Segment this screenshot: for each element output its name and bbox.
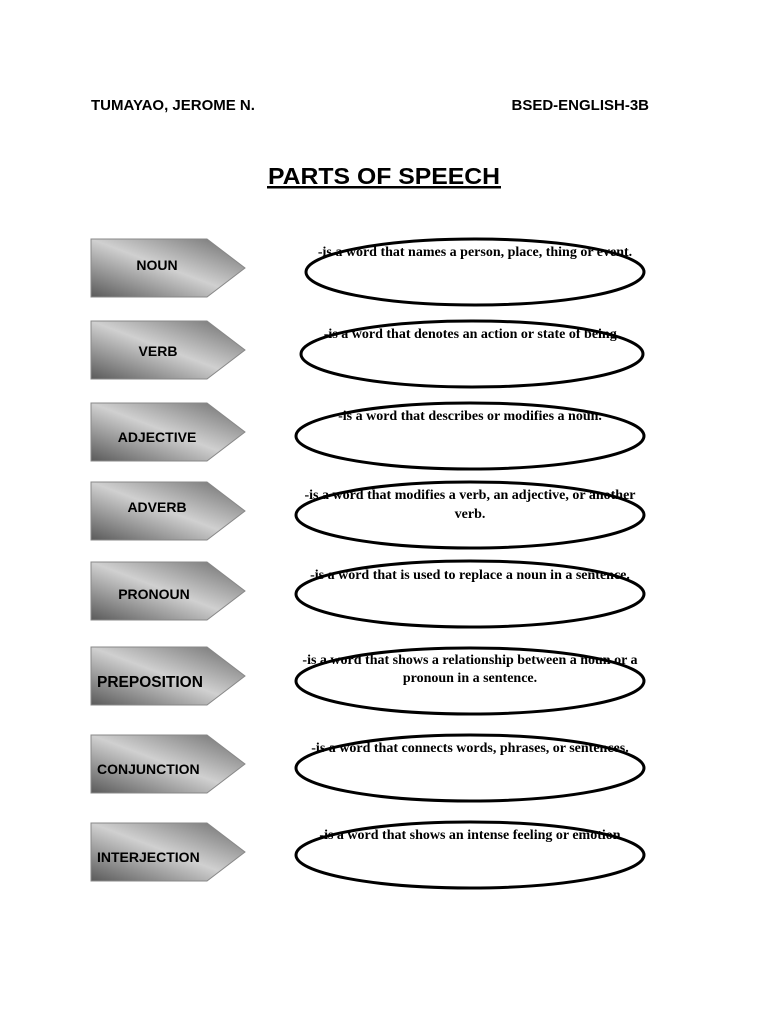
row: conjunction: [91, 735, 644, 801]
title: PARTS OF SPEECH: [268, 163, 500, 189]
row: pronoun: [91, 561, 644, 627]
row: pronoun: -is a word that is used to replace a noun in a sentence.: [310, 568, 630, 583]
row: preposition: pronoun in a sentence.: [403, 671, 537, 686]
row: adjective: -is a word that describes or modifies a noun.: [338, 409, 602, 424]
row: verb: [91, 321, 643, 387]
row: preposition: PREPOSITION: [97, 674, 203, 691]
row: adverb: [91, 482, 644, 548]
row: adverb: ADVERB: [127, 499, 187, 515]
header: course: BSED-ENGLISH-3B: [511, 97, 649, 114]
row: verb: VERB: [139, 343, 177, 359]
row: interjection: INTERJECTION: [97, 849, 200, 865]
row: interjection: -is a word that shows an intense feeling or emotion: [319, 828, 621, 843]
row: conjunction: -is a word that connects words, phrases, or sentences.: [311, 741, 629, 756]
row: preposition: -is a word that shows a relationship between a noun or a: [302, 653, 638, 668]
row: adjective: ADJECTIVE: [118, 429, 196, 445]
row: noun: [91, 239, 644, 305]
row: noun: NOUN: [136, 257, 178, 273]
row: conjunction: CONJUNCTION: [97, 761, 200, 777]
header: name: TUMAYAO, JEROME N.: [91, 97, 255, 114]
row: adverb: -is a word that modifies a verb, an adjective, or another: [304, 488, 636, 503]
row: preposition: [91, 647, 644, 714]
row: noun: -is a word that names a person, place, thing or event.: [318, 245, 632, 260]
row: adjective: [91, 403, 644, 469]
row: adverb: verb.: [455, 507, 485, 522]
row: pronoun: PRONOUN: [118, 586, 190, 602]
row: verb: -is a word that denotes an action or state of being.: [324, 327, 620, 342]
row: interjection: [91, 822, 644, 888]
